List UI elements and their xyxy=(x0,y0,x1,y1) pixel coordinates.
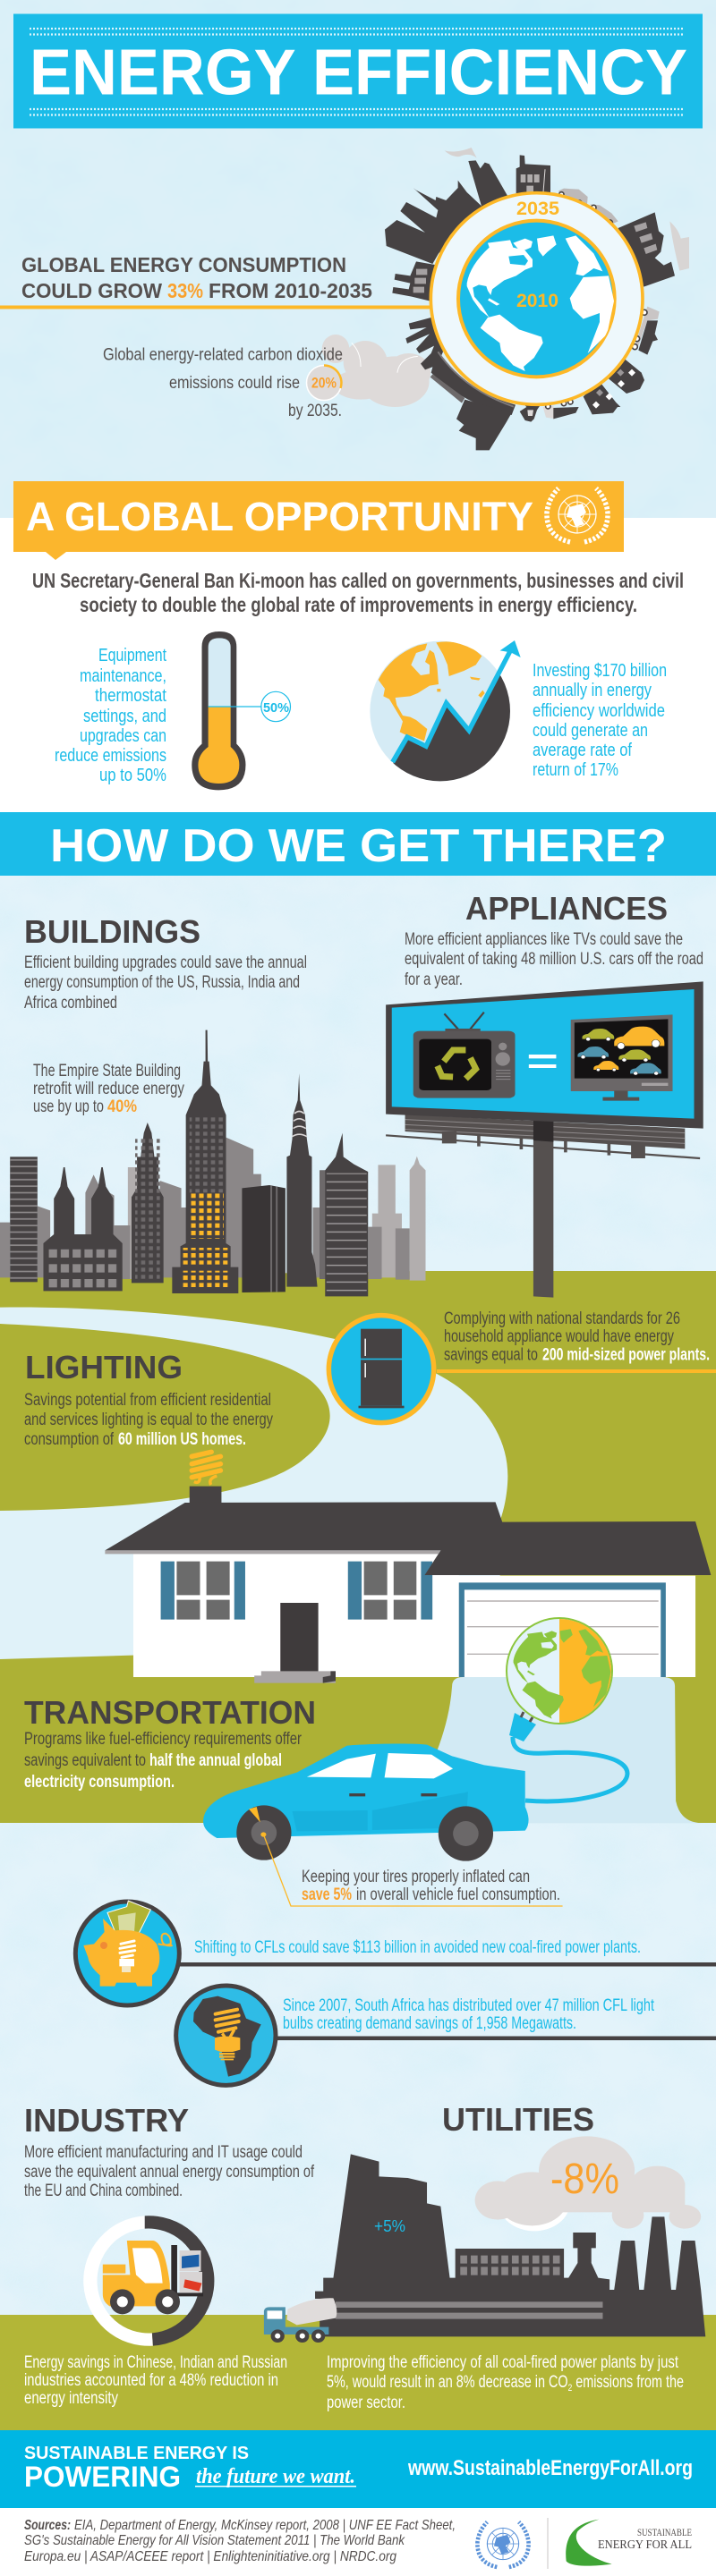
illustration: power plant xyxy=(315,2154,705,2336)
front door xyxy=(280,1603,319,1672)
sources xyxy=(24,2518,456,2564)
plug xyxy=(509,1712,536,1741)
cloud right xyxy=(669,221,689,271)
text: industry description: save the equivalent annual energy consumption of xyxy=(24,2163,315,2182)
illustration: city skyline xyxy=(0,1030,426,1296)
spire tower xyxy=(132,1123,164,1283)
title banner xyxy=(13,14,703,129)
China flag box xyxy=(180,2272,202,2292)
icon: monitor with cars xyxy=(571,1014,673,1101)
background light towers xyxy=(128,1157,426,1281)
tire callout line xyxy=(263,1835,563,1906)
slogan xyxy=(24,2444,356,2493)
text: equipment maintenance: Equipment xyxy=(98,646,166,665)
text: empire state building: use by up to xyxy=(33,1097,104,1116)
billboard pole xyxy=(533,1121,553,1298)
label: 2035: 2035 xyxy=(516,199,559,219)
background: white opportunity section xyxy=(0,518,716,813)
yellow rule from refrigerator xyxy=(437,1369,716,1373)
label: 2010: 2010 xyxy=(516,291,558,311)
label: 50 percent: 50% xyxy=(263,700,289,716)
left window xyxy=(161,1562,245,1620)
billboard frame xyxy=(386,981,703,1129)
chart: globe with rising arrow xyxy=(370,640,521,787)
text: investing $170 billion: average rate of xyxy=(533,741,632,760)
icon: piggy bank xyxy=(75,1901,179,2005)
left wheel xyxy=(236,1805,292,1860)
text: equipment maintenance: settings, and xyxy=(83,707,166,726)
illustration: billboard xyxy=(386,981,703,1298)
text: investing $170 billion: could generate an xyxy=(533,721,648,741)
heading: utilities: UTILITIES xyxy=(442,2101,594,2138)
text: transportation description: savings equivalent to xyxy=(24,1751,146,1770)
garage door xyxy=(459,1582,666,1677)
text: transportation description: Programs like fuel-efficiency requirements offer xyxy=(24,1730,303,1749)
heading: global energy consumption xyxy=(21,253,372,302)
rule: South Africa xyxy=(268,2036,716,2040)
roof eave xyxy=(105,1550,440,1554)
striped left tower xyxy=(10,1157,38,1282)
text: energy savings xyxy=(24,2353,287,2408)
chart: 20 percent ring xyxy=(306,365,342,401)
text: energy savings: energy intensity xyxy=(24,2389,118,2408)
illustration: city around the world xyxy=(385,148,689,450)
bottom vehicles xyxy=(520,400,579,422)
chimney and CFL bulb xyxy=(190,1452,221,1503)
logo: Sustainable Energy for All: SUSTAINABLE xyxy=(637,2526,692,2538)
text: investing $170 billion: annually in energy xyxy=(533,681,652,700)
logo: Sustainable Energy for All xyxy=(566,2520,692,2566)
text: transportation description xyxy=(24,1730,303,1792)
text: empire state building: The Empire State Building xyxy=(33,1062,181,1080)
text: lighting description: consumption of xyxy=(24,1430,115,1449)
text: buildings description: Africa combined xyxy=(24,994,117,1013)
main wall xyxy=(133,1554,459,1677)
slogan: the future we want. xyxy=(196,2465,355,2488)
lower left buildings xyxy=(405,318,443,369)
wheels xyxy=(110,2289,180,2314)
driveway xyxy=(411,1677,703,1823)
label: minus 8 percent: -8% xyxy=(550,2156,619,2203)
heading: buildings: BUILDINGS xyxy=(24,913,200,950)
text: transportation description: half the annual global xyxy=(149,1751,282,1770)
sources: Europa.eu | ASAP/ACEEE report | Enlighteninitiative.org | NRDC.org xyxy=(24,2549,396,2564)
bottom tower xyxy=(456,400,512,450)
text: equipment maintenance: reduce emissions xyxy=(55,746,166,766)
slogan: SUSTAINABLE ENERGY IS xyxy=(24,2444,249,2463)
striped right tower xyxy=(320,1133,368,1296)
recycle symbol xyxy=(438,1050,476,1079)
car windows xyxy=(307,1753,453,1778)
footer band xyxy=(0,2430,716,2508)
left small building xyxy=(392,261,435,301)
heading: global energy consumption: GLOBAL ENERGY CONSUMPTION xyxy=(21,253,346,276)
right building xyxy=(618,212,675,287)
smoke puff xyxy=(445,148,477,158)
text: coal-fired plants xyxy=(327,2353,684,2412)
steps xyxy=(254,1671,336,1683)
band: how do we get there: HOW DO WE GET THERE? xyxy=(50,820,667,872)
text: national standards xyxy=(444,1309,710,1365)
icon: UN emblem xyxy=(547,488,608,542)
text: tire inflation xyxy=(302,1868,560,1904)
text: coal-fired plants: power sector. xyxy=(327,2394,405,2412)
plant windows xyxy=(460,2256,560,2275)
rule: CFL savings xyxy=(179,1962,716,1966)
power cord xyxy=(513,1737,627,1801)
text: lighting description: 60 million US homes. xyxy=(118,1430,246,1449)
illustration: forklift in ring xyxy=(83,2216,214,2346)
icon: TV with recycle xyxy=(413,1013,516,1098)
text: carbon dioxide emissions: by 2035. xyxy=(288,402,342,420)
heading: global energy consumption: COULD GROW xyxy=(21,279,162,302)
right window xyxy=(348,1562,432,1620)
text: energy savings: industries accounted for a 48% reduction in xyxy=(24,2371,278,2390)
door panels xyxy=(293,1792,468,1831)
text: lighting description: and services lighting is equal to the energy xyxy=(24,1411,273,1429)
EU flag box xyxy=(180,2250,200,2271)
plant stripes xyxy=(336,2301,602,2319)
cars xyxy=(577,1027,664,1075)
text: carbon dioxide emissions: Global energy-related carbon dioxide xyxy=(103,345,343,365)
icon: cement truck xyxy=(264,2298,337,2343)
text: equipment maintenance: up to 50% xyxy=(99,766,166,785)
label: plus 5 percent: +5% xyxy=(374,2217,405,2235)
text: industry description xyxy=(24,2143,315,2200)
bottom arc building xyxy=(430,350,516,415)
text: carbon dioxide emissions: emissions could rise xyxy=(169,374,300,393)
text: buildings description: Efficient building upgrades could save the annual xyxy=(24,953,307,972)
pig body xyxy=(83,1919,159,1987)
forklift body xyxy=(103,2241,170,2306)
road winding through the ground xyxy=(0,1307,507,1659)
text: coal-fired plants: 2 xyxy=(568,2383,572,2394)
forklift window xyxy=(132,2248,163,2284)
text: empire state building xyxy=(33,1062,184,1116)
text: South Africa CFL xyxy=(283,1996,655,2033)
text: equipment maintenance: thermostat xyxy=(95,686,166,706)
chart: thermometer 50 percent xyxy=(192,631,290,790)
door handles xyxy=(349,1793,437,1796)
outer ring 2035 xyxy=(430,193,643,404)
skyline cluster xyxy=(385,181,482,264)
text: lighting description: Savings potential from efficient residential xyxy=(24,1391,271,1410)
twin spire building xyxy=(43,1167,123,1291)
illustration: electric car xyxy=(203,1744,563,1906)
footer divider xyxy=(548,2518,549,2569)
logo: United Nations xyxy=(477,2522,529,2567)
background mid towers xyxy=(0,1138,410,1280)
billboard screen xyxy=(392,989,695,1119)
text: South Africa CFL: bulbs creating demand savings of 1,958 Megawatts. xyxy=(283,2014,576,2033)
heading: global energy consumption: 33% xyxy=(167,279,203,302)
text: buildings description xyxy=(24,953,307,1013)
text: buildings description: energy consumption of the US, Russia, India and xyxy=(24,973,300,992)
text: equipment maintenance: maintenance, xyxy=(80,666,166,686)
delivery truck xyxy=(632,307,660,355)
empire state building xyxy=(172,1030,238,1293)
text: industry description: the EU and China combined. xyxy=(24,2182,183,2200)
money xyxy=(107,1901,150,1934)
heading: lighting: LIGHTING xyxy=(25,1349,183,1385)
text: empire state building: retrofit will reduce energy xyxy=(33,1080,184,1098)
text: equipment maintenance xyxy=(55,646,166,785)
heading: appliances: APPLIANCES xyxy=(465,890,668,927)
bottom right houses xyxy=(584,360,644,414)
text: investing $170 billion: return of 17% xyxy=(533,760,618,780)
sources: Sources: xyxy=(24,2518,71,2533)
heading: global energy consumption: FROM 2010-2035 xyxy=(209,279,372,302)
ring xyxy=(83,2216,214,2346)
text: empire state building: 40% xyxy=(107,1097,137,1116)
text: transportation description: electricity consumption. xyxy=(24,1773,175,1792)
background: green ground xyxy=(0,1271,716,1823)
sources: EIA, Department of Energy, McKinsey report, 2008 | UNF EE Fact Sheet, xyxy=(74,2518,456,2533)
mast and forks xyxy=(171,2245,203,2296)
text: appliances description xyxy=(405,930,703,989)
band: how do we get there xyxy=(0,812,716,876)
chart: 20 percent ring: 20% xyxy=(311,374,337,392)
cloud: emissions smoke xyxy=(322,335,430,407)
background: lower green ground xyxy=(0,2315,716,2431)
globe half green half yellow xyxy=(507,1618,612,1724)
equals sign xyxy=(529,1055,556,1068)
globe 2010 xyxy=(458,221,615,377)
text: tire inflation: in overall vehicle fuel consumption. xyxy=(356,1885,560,1904)
banner: a global opportunity: A GLOBAL OPPORTUNITY xyxy=(26,494,533,539)
black tower xyxy=(242,1185,286,1292)
text: energy savings: Energy savings in Chinese, Indian and Russian xyxy=(24,2353,287,2372)
background: middle sky xyxy=(0,876,716,1287)
cars on top xyxy=(558,189,618,225)
illustration: house xyxy=(105,1452,711,1683)
right wheel xyxy=(439,1806,493,1861)
icon: Africa with bulb xyxy=(176,1986,276,2085)
text: tire inflation: save 5% xyxy=(302,1885,352,1904)
billboard under-structure xyxy=(386,1114,700,1158)
text: industry description: More efficient manufacturing and IT usage could xyxy=(24,2143,303,2162)
heading: industry: INDUSTRY xyxy=(24,2102,189,2139)
icon: plug globe xyxy=(507,1618,627,1801)
text: equipment maintenance: upgrades can xyxy=(80,726,166,746)
text: investing $170 billion: efficiency worldwide xyxy=(533,701,665,721)
roof xyxy=(105,1502,711,1575)
car body xyxy=(203,1744,529,1838)
text: coal-fired plants: emissions from the xyxy=(572,2373,684,2392)
logo: Sustainable Energy for All: ENERGY FOR ALL xyxy=(598,2538,692,2552)
factory building xyxy=(516,155,550,194)
heading: transportation: TRANSPORTATION xyxy=(24,1694,316,1731)
circle: refrigerator xyxy=(328,1316,434,1423)
sources: SG's Sustainable Energy for All Vision Statement 2011 | The World Bank xyxy=(24,2533,405,2548)
illustration: cloud -8 percent xyxy=(475,2136,701,2231)
smokestack building xyxy=(468,160,507,208)
text: appliances description: for a year. xyxy=(405,970,463,989)
text: lighting description xyxy=(24,1391,273,1449)
title banner: ENERGY EFFICIENCY xyxy=(30,38,687,109)
chrysler building xyxy=(286,1073,318,1287)
background: top sky xyxy=(0,0,716,519)
banner: a global opportunity xyxy=(13,481,624,560)
yellow rule to globe xyxy=(0,306,433,309)
text: national standards: savings equal to xyxy=(444,1345,538,1365)
text: tire inflation: Keeping your tires properly inflated can xyxy=(302,1868,530,1886)
text: UN Secretary-General xyxy=(32,569,684,616)
white CFL xyxy=(119,1941,135,1972)
text: coal-fired plants: 5%, would result in an 8% decrease in CO xyxy=(327,2373,645,2392)
text: carbon dioxide emissions xyxy=(103,345,343,420)
garage wall xyxy=(424,1576,695,1677)
slogan: POWERING xyxy=(24,2461,181,2493)
text: investing $170 billion xyxy=(533,661,667,780)
text: investing $170 billion: Investing $170 billion xyxy=(533,661,667,681)
background: lower sky xyxy=(0,1823,716,2317)
